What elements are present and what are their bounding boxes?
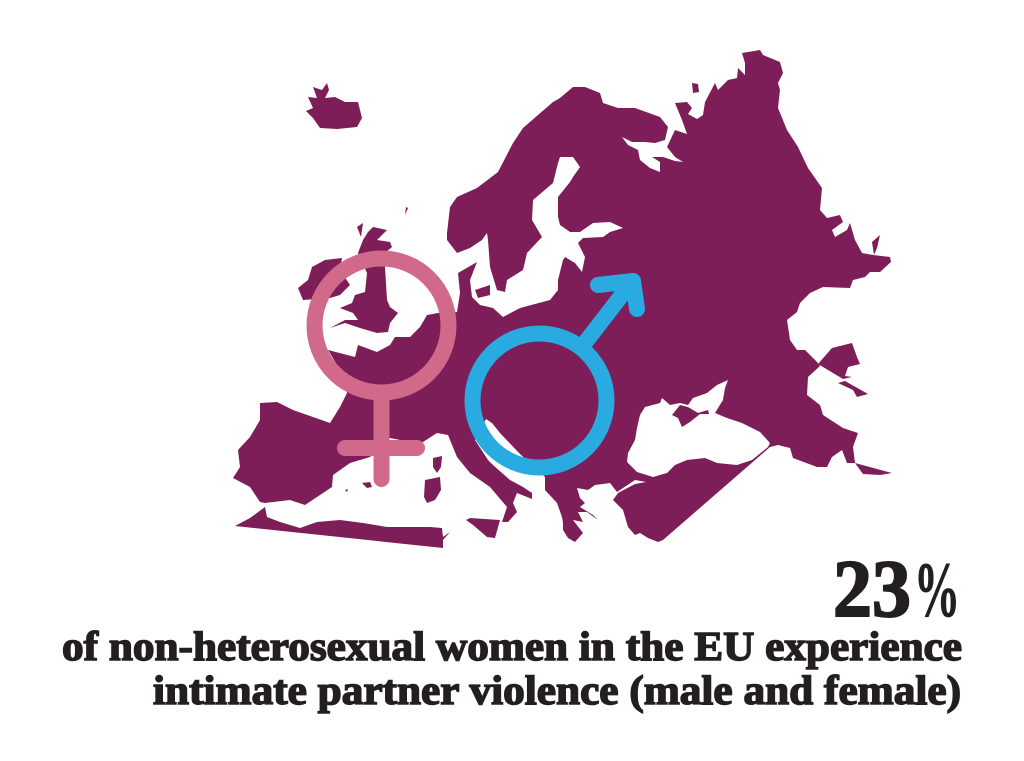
Kazakhstan shore and Caspian spit (818, 343, 868, 397)
Sicily (466, 518, 500, 538)
eastern sliver (855, 463, 892, 475)
caption line 1: of non-heterosexual women in the EU experience (62, 623, 962, 669)
Corsica (433, 456, 442, 473)
north African coast strip (235, 507, 450, 548)
map of Europe (233, 50, 892, 548)
icon: male symbol (472, 281, 637, 468)
icon: female symbol (314, 258, 448, 479)
statistic: 23%: 23 (833, 543, 911, 634)
statistic: 23%: % (914, 546, 960, 633)
Sardinia (424, 477, 441, 503)
Balearic Islands (345, 482, 372, 492)
Arctic and eastern islets (692, 83, 880, 255)
Danish islands (475, 285, 490, 298)
Great Britain (330, 227, 398, 333)
statistic: 23% (833, 543, 960, 634)
caption line 2: intimate partner violence (male and female) (153, 667, 961, 713)
Scottish islands (357, 207, 408, 237)
Ireland (298, 258, 350, 300)
Iceland (306, 83, 362, 129)
mainland Europe with Black Sea (233, 50, 891, 542)
